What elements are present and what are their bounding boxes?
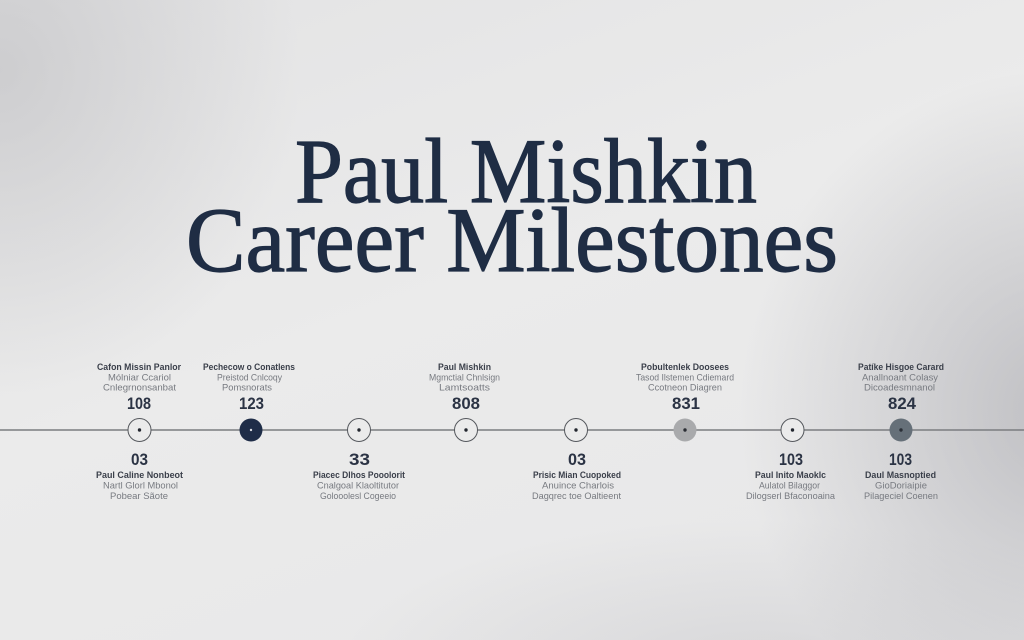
milestone 5 bottom: 103 (889, 450, 912, 469)
milestone 3 top (429, 362, 500, 413)
title: Career Milestones (186, 189, 838, 291)
milestone 3 top: 808 (452, 394, 480, 413)
milestone 5 bottom: Daul Masnoptied (865, 470, 936, 480)
milestone 1 top: Cnlegrnonsanbat (103, 382, 176, 392)
milestone 1 bottom: 03 (131, 450, 148, 469)
milestone 3 bottom: Anuince Charlois (542, 480, 614, 490)
milestone 3 top: Lamtsoatts (439, 382, 490, 392)
milestone 1 bottom: Paul Caline Nonbeot (96, 470, 183, 480)
milestone 5 top: 824 (888, 394, 917, 413)
milestone 1 top: Cafon Missin Panlor (97, 362, 181, 372)
milestone 4 top: Tasod Ilstemen Cdiemard (636, 372, 734, 382)
milestone 5 top: Dicoadesmnanol (864, 382, 935, 392)
node 4 (454, 418, 478, 442)
milestone 3 bottom: 03 (568, 450, 586, 469)
milestone 4 top: Ccotneon Diagren (648, 382, 722, 392)
node 5 (564, 418, 588, 442)
milestone 5 top: Anallnoant Colasy (862, 372, 938, 382)
milestone 3 bottom: Prisic Mian Cuopoked (533, 470, 621, 480)
node 3 (348, 418, 370, 442)
milestone 4 bottom: Dilogserl Bfaconoaina (746, 491, 836, 501)
milestone 3 bottom: Dagqrec toe Oaltieent (532, 491, 621, 501)
timeline axis (0, 429, 1024, 431)
milestone 4 bottom (746, 450, 836, 501)
milestone 2 top: Preistod Cnlcoqy (217, 372, 282, 382)
milestone 5 top: Patíke Hisgoe Carard (858, 362, 944, 372)
milestone 1 top: Mólniar Ccariol (108, 372, 171, 382)
milestone 1 bottom (96, 450, 183, 501)
milestone 4 top: Pobultenlek Doosees (641, 362, 729, 372)
milestone 2 bottom: Piacec Dlhos Pooolorit (313, 470, 405, 480)
milestone 4 bottom: Aulatol Bilaggor (759, 480, 820, 490)
node 6 (674, 418, 696, 442)
milestone 5 bottom: Pilageciel Coenen (864, 491, 938, 501)
title: Paul Mishkin (295, 120, 757, 222)
milestone 1 top (97, 362, 181, 413)
milestone 5 bottom: GioDoriaipie (875, 480, 927, 490)
milestone 4 top (636, 362, 734, 413)
milestone 2 bottom: Golooolesl Cogeeio (320, 491, 396, 501)
milestone 2 top: Pomsnorats (222, 382, 272, 392)
node 7 (781, 418, 804, 442)
milestone 5 top (858, 362, 944, 413)
milestone 2 top: Pechecow o Conatlens (203, 362, 295, 372)
milestone 3 bottom (532, 450, 621, 501)
milestone 3 top: Paul Mishkin (438, 362, 491, 372)
node 2 (240, 418, 262, 442)
milestone 2 top (203, 362, 295, 413)
node 1 (128, 418, 151, 442)
milestone 2 bottom: 33 (349, 450, 370, 469)
milestone 2 bottom: Cnalgoal Klaoltitutor (317, 480, 399, 490)
milestone 2 bottom (313, 450, 405, 501)
node 8 (890, 418, 912, 442)
milestone 5 bottom (864, 450, 938, 501)
milestone 3 top: Mgmctial Chnlsign (429, 372, 500, 382)
milestone 1 bottom: Nartl Glorl Mbonol (103, 480, 178, 490)
milestone 1 top: 108 (127, 394, 151, 413)
title (186, 120, 838, 291)
milestone 4 bottom: Paul Inito Maoklc (755, 470, 826, 480)
milestone 2 top: 123 (239, 394, 264, 413)
milestone 1 bottom: Pobear Sãote (110, 491, 168, 501)
milestone 4 bottom: 103 (779, 450, 803, 469)
milestone 4 top: 831 (672, 394, 700, 413)
